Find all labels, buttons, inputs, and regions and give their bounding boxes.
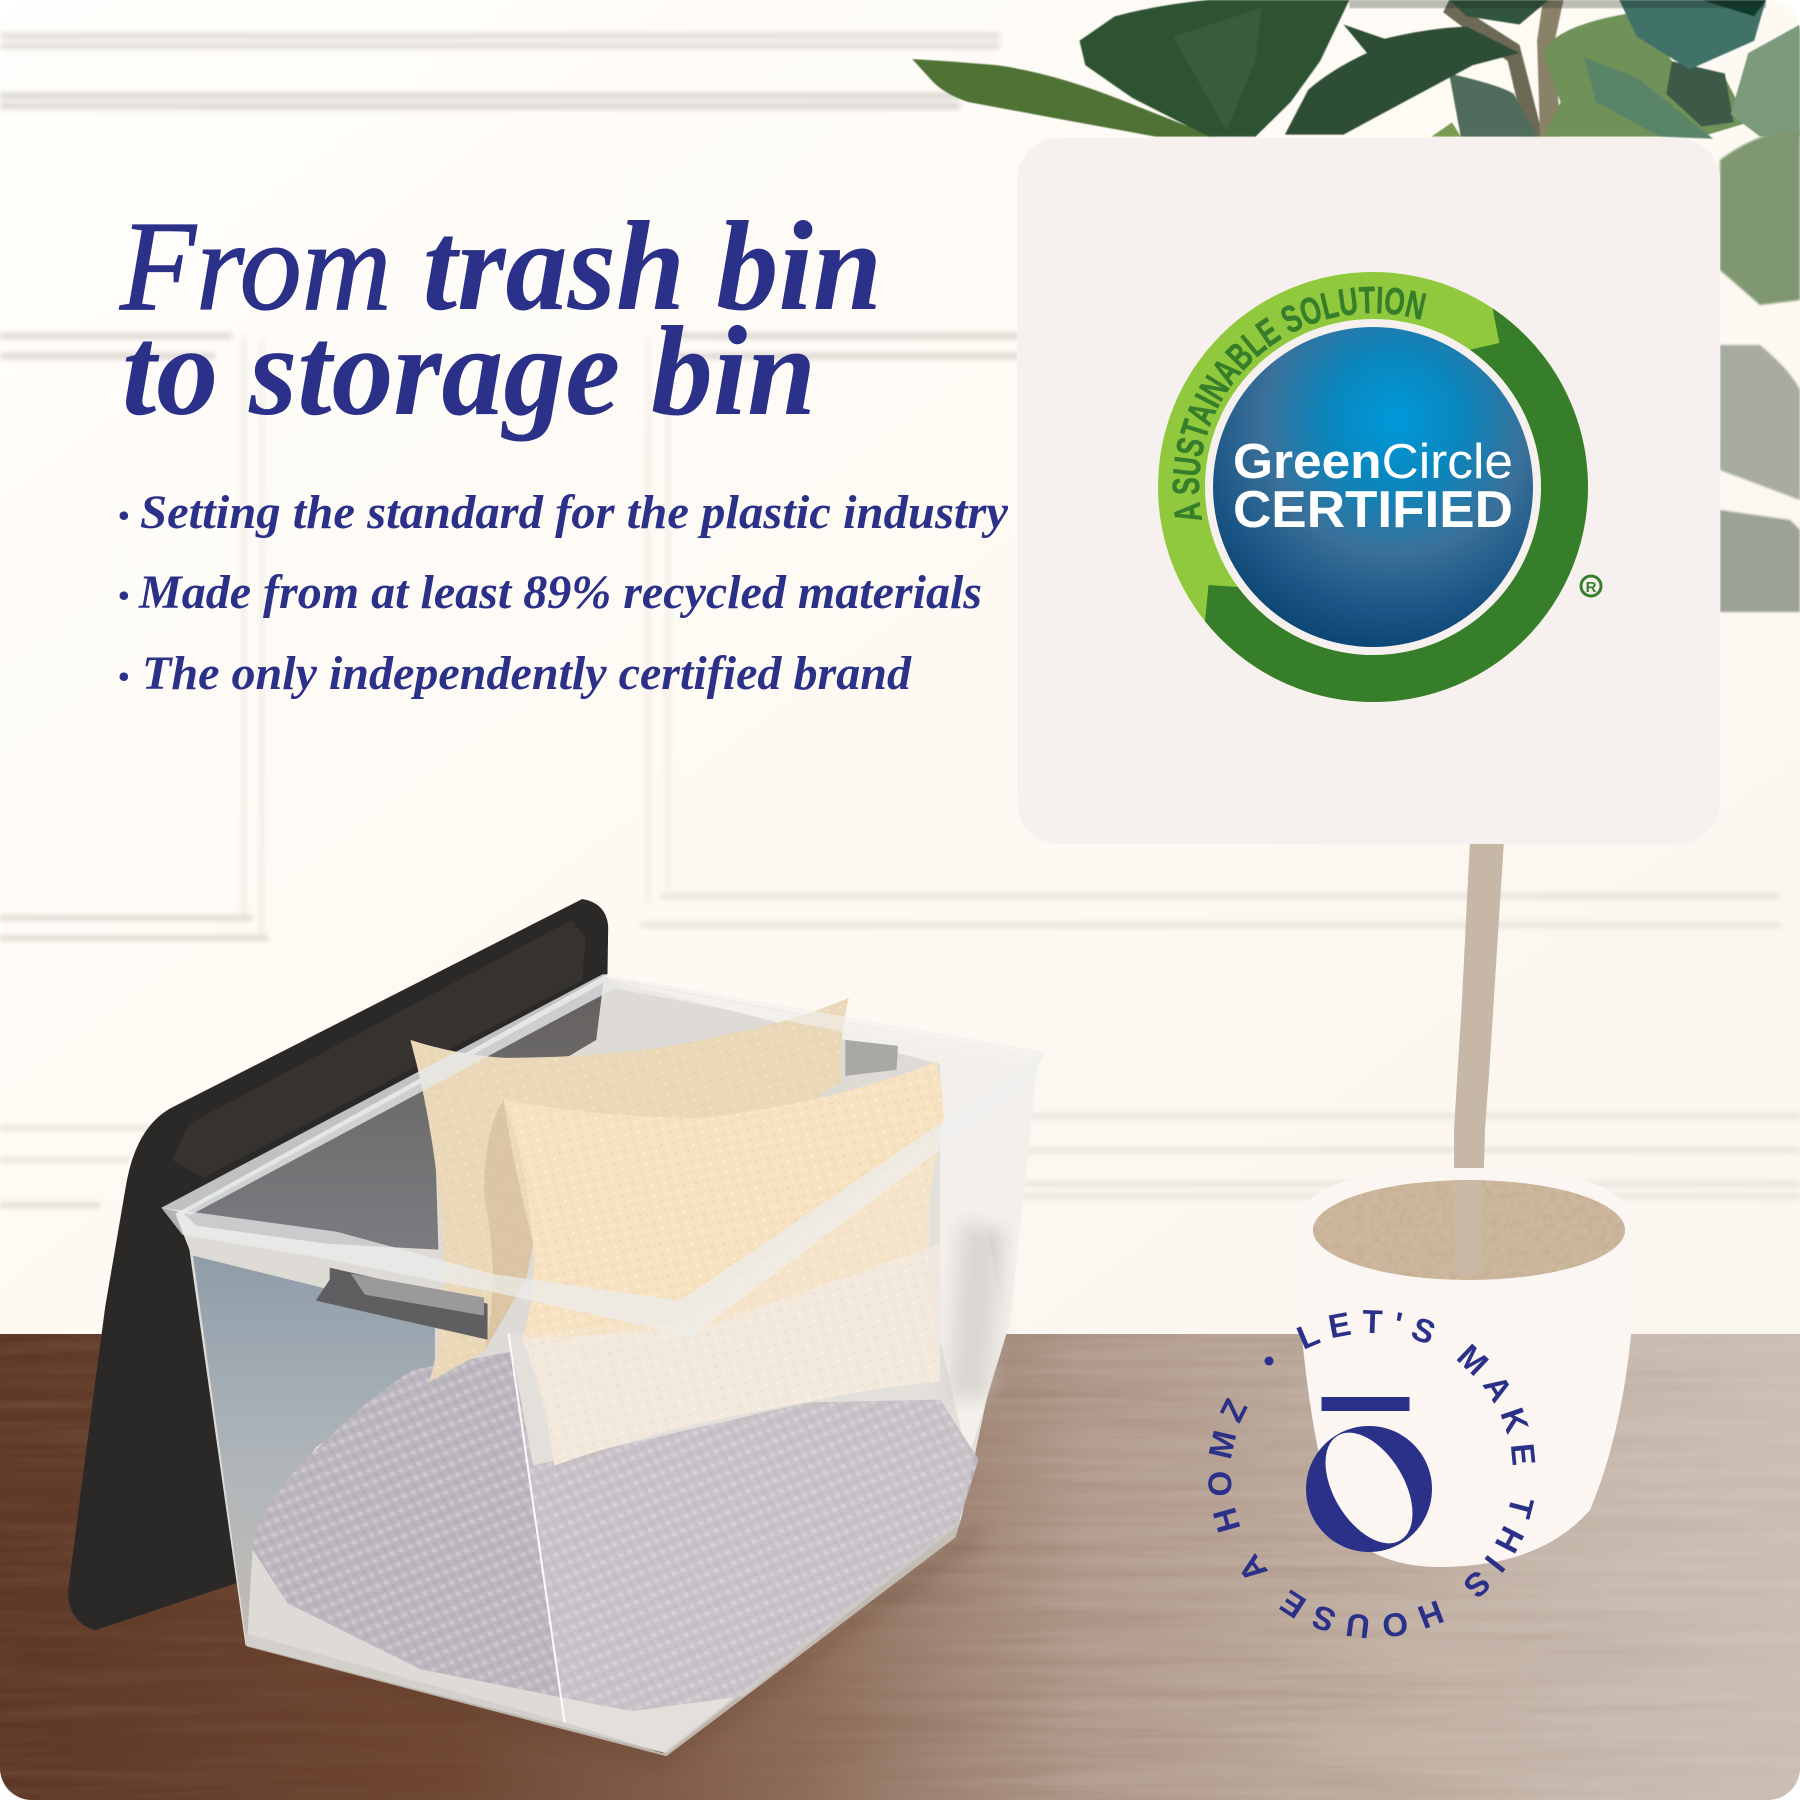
bin interior and through-plastic shading — [175, 977, 1038, 1753]
wall — [0, 0, 1800, 1340]
plant pot — [1296, 1168, 1636, 1567]
floor — [0, 1334, 1800, 1800]
front handle latch — [316, 1268, 488, 1340]
blue globe — [1213, 327, 1533, 647]
foliage right of panel — [1720, 130, 1800, 612]
Homz circular logo — [1208, 1310, 1536, 1638]
registered mark — [1581, 576, 1601, 596]
GreenCircle badge — [1158, 272, 1602, 702]
bin base — [246, 1519, 961, 1756]
headline: From trash bin — [119, 195, 882, 337]
bullet 1: Setting the standard for the plastic industry — [140, 486, 1009, 539]
ring slogan: A SUSTAINABLE SOLUTION — [1172, 286, 1426, 520]
bullet 2: Made from at least 89% recycled materials — [138, 566, 982, 619]
bin corner seam — [509, 1334, 565, 1723]
wall moldings — [0, 36, 1800, 1205]
CERTIFIED wordmark: CERTIFIED — [1233, 481, 1513, 539]
light green ring — [1158, 272, 1588, 702]
bullet 3: • — [118, 658, 129, 694]
GreenCircle wordmark: GreenCircle — [1233, 435, 1513, 489]
certification panel — [1017, 138, 1720, 844]
logo o glyph — [1306, 1426, 1432, 1552]
bullet 3: The only independently certified brand — [142, 647, 912, 700]
badge inner ring — [1205, 319, 1541, 655]
black lid — [68, 899, 608, 1630]
bullet 2: • — [118, 577, 129, 613]
bullet list — [118, 486, 1009, 700]
logo bar over o — [1322, 1397, 1410, 1411]
bin floor shadow — [770, 1530, 979, 1680]
registered mark: R — [1586, 579, 1597, 596]
plant trunk — [1454, 844, 1504, 1168]
headline: to storage bin — [122, 300, 816, 442]
front gold pillow — [504, 1061, 944, 1465]
plant foliage — [912, 0, 1800, 139]
bullet 1: • — [118, 497, 129, 533]
back gold pillow — [410, 998, 849, 1382]
knitted blanket — [253, 1352, 979, 1711]
headline — [119, 195, 882, 442]
storage bin group — [68, 899, 1045, 1771]
bin rim — [161, 974, 1045, 1753]
logo dot — [1264, 1356, 1274, 1366]
back handle clip — [845, 1040, 898, 1076]
circular slogan: LET'S MAKE THIS HOUSE A HOMZ — [1208, 1310, 1536, 1638]
dark green arrow ring — [1205, 308, 1588, 702]
